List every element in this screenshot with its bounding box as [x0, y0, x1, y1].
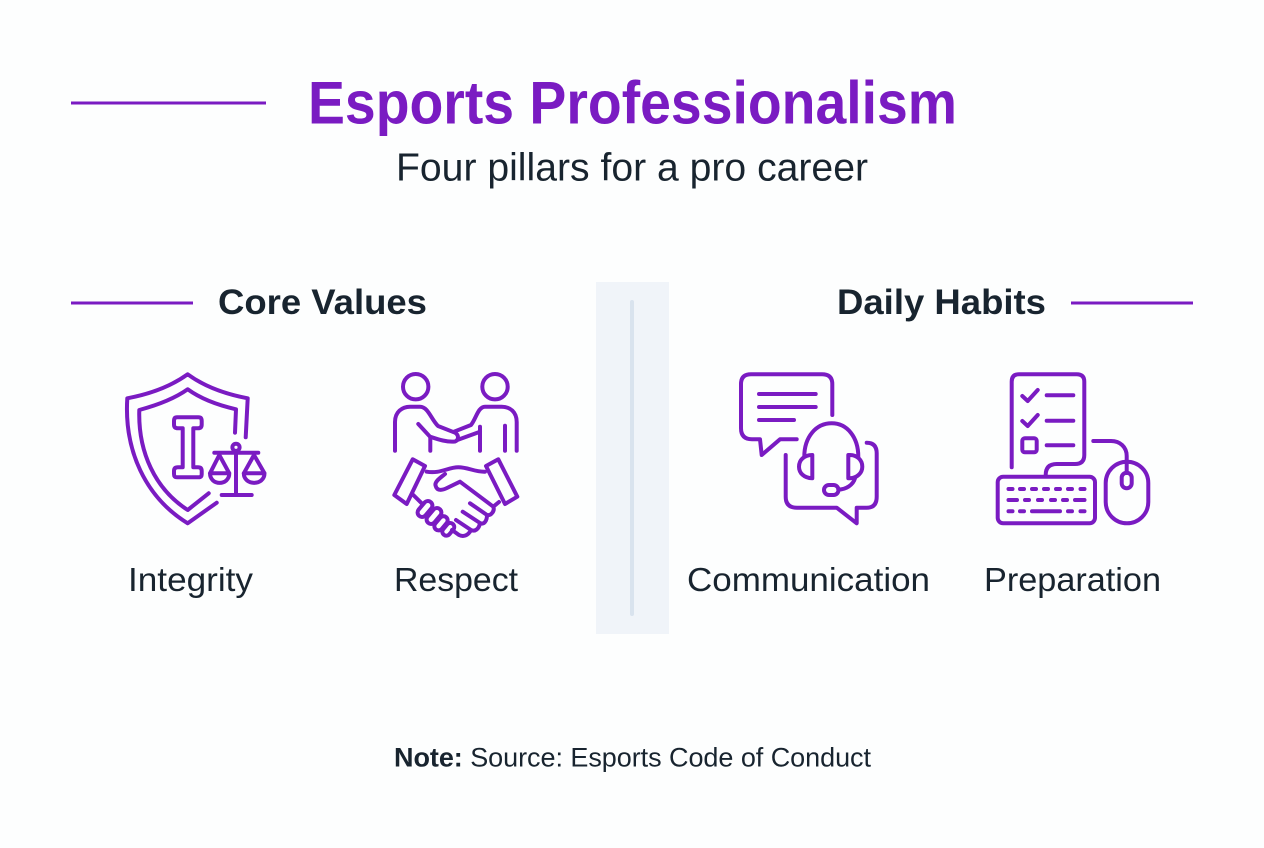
title: Esports Professionalism — [308, 70, 957, 136]
section: core values heading — [71, 283, 427, 322]
label: integrity: Integrity — [128, 561, 254, 598]
section: core values heading: Core Values — [218, 283, 427, 322]
icon: people shaking hands — [394, 374, 517, 537]
divider panel — [596, 282, 669, 634]
section: daily habits heading — [837, 283, 1193, 322]
icon: chat bubbles with headset — [741, 374, 877, 523]
section: daily habits heading: Daily Habits — [837, 283, 1046, 322]
icon: shield with scales — [127, 374, 264, 523]
note: Note: Source: Esports Code of Conduct — [394, 742, 871, 772]
label: respect: Respect — [394, 561, 518, 598]
subtitle: Four pillars for a pro career — [396, 146, 868, 190]
label: communication: Communication — [687, 561, 930, 598]
title rule — [71, 102, 266, 104]
label: preparation: Preparation — [984, 561, 1161, 598]
icon: checklist keyboard and mouse — [998, 374, 1148, 523]
